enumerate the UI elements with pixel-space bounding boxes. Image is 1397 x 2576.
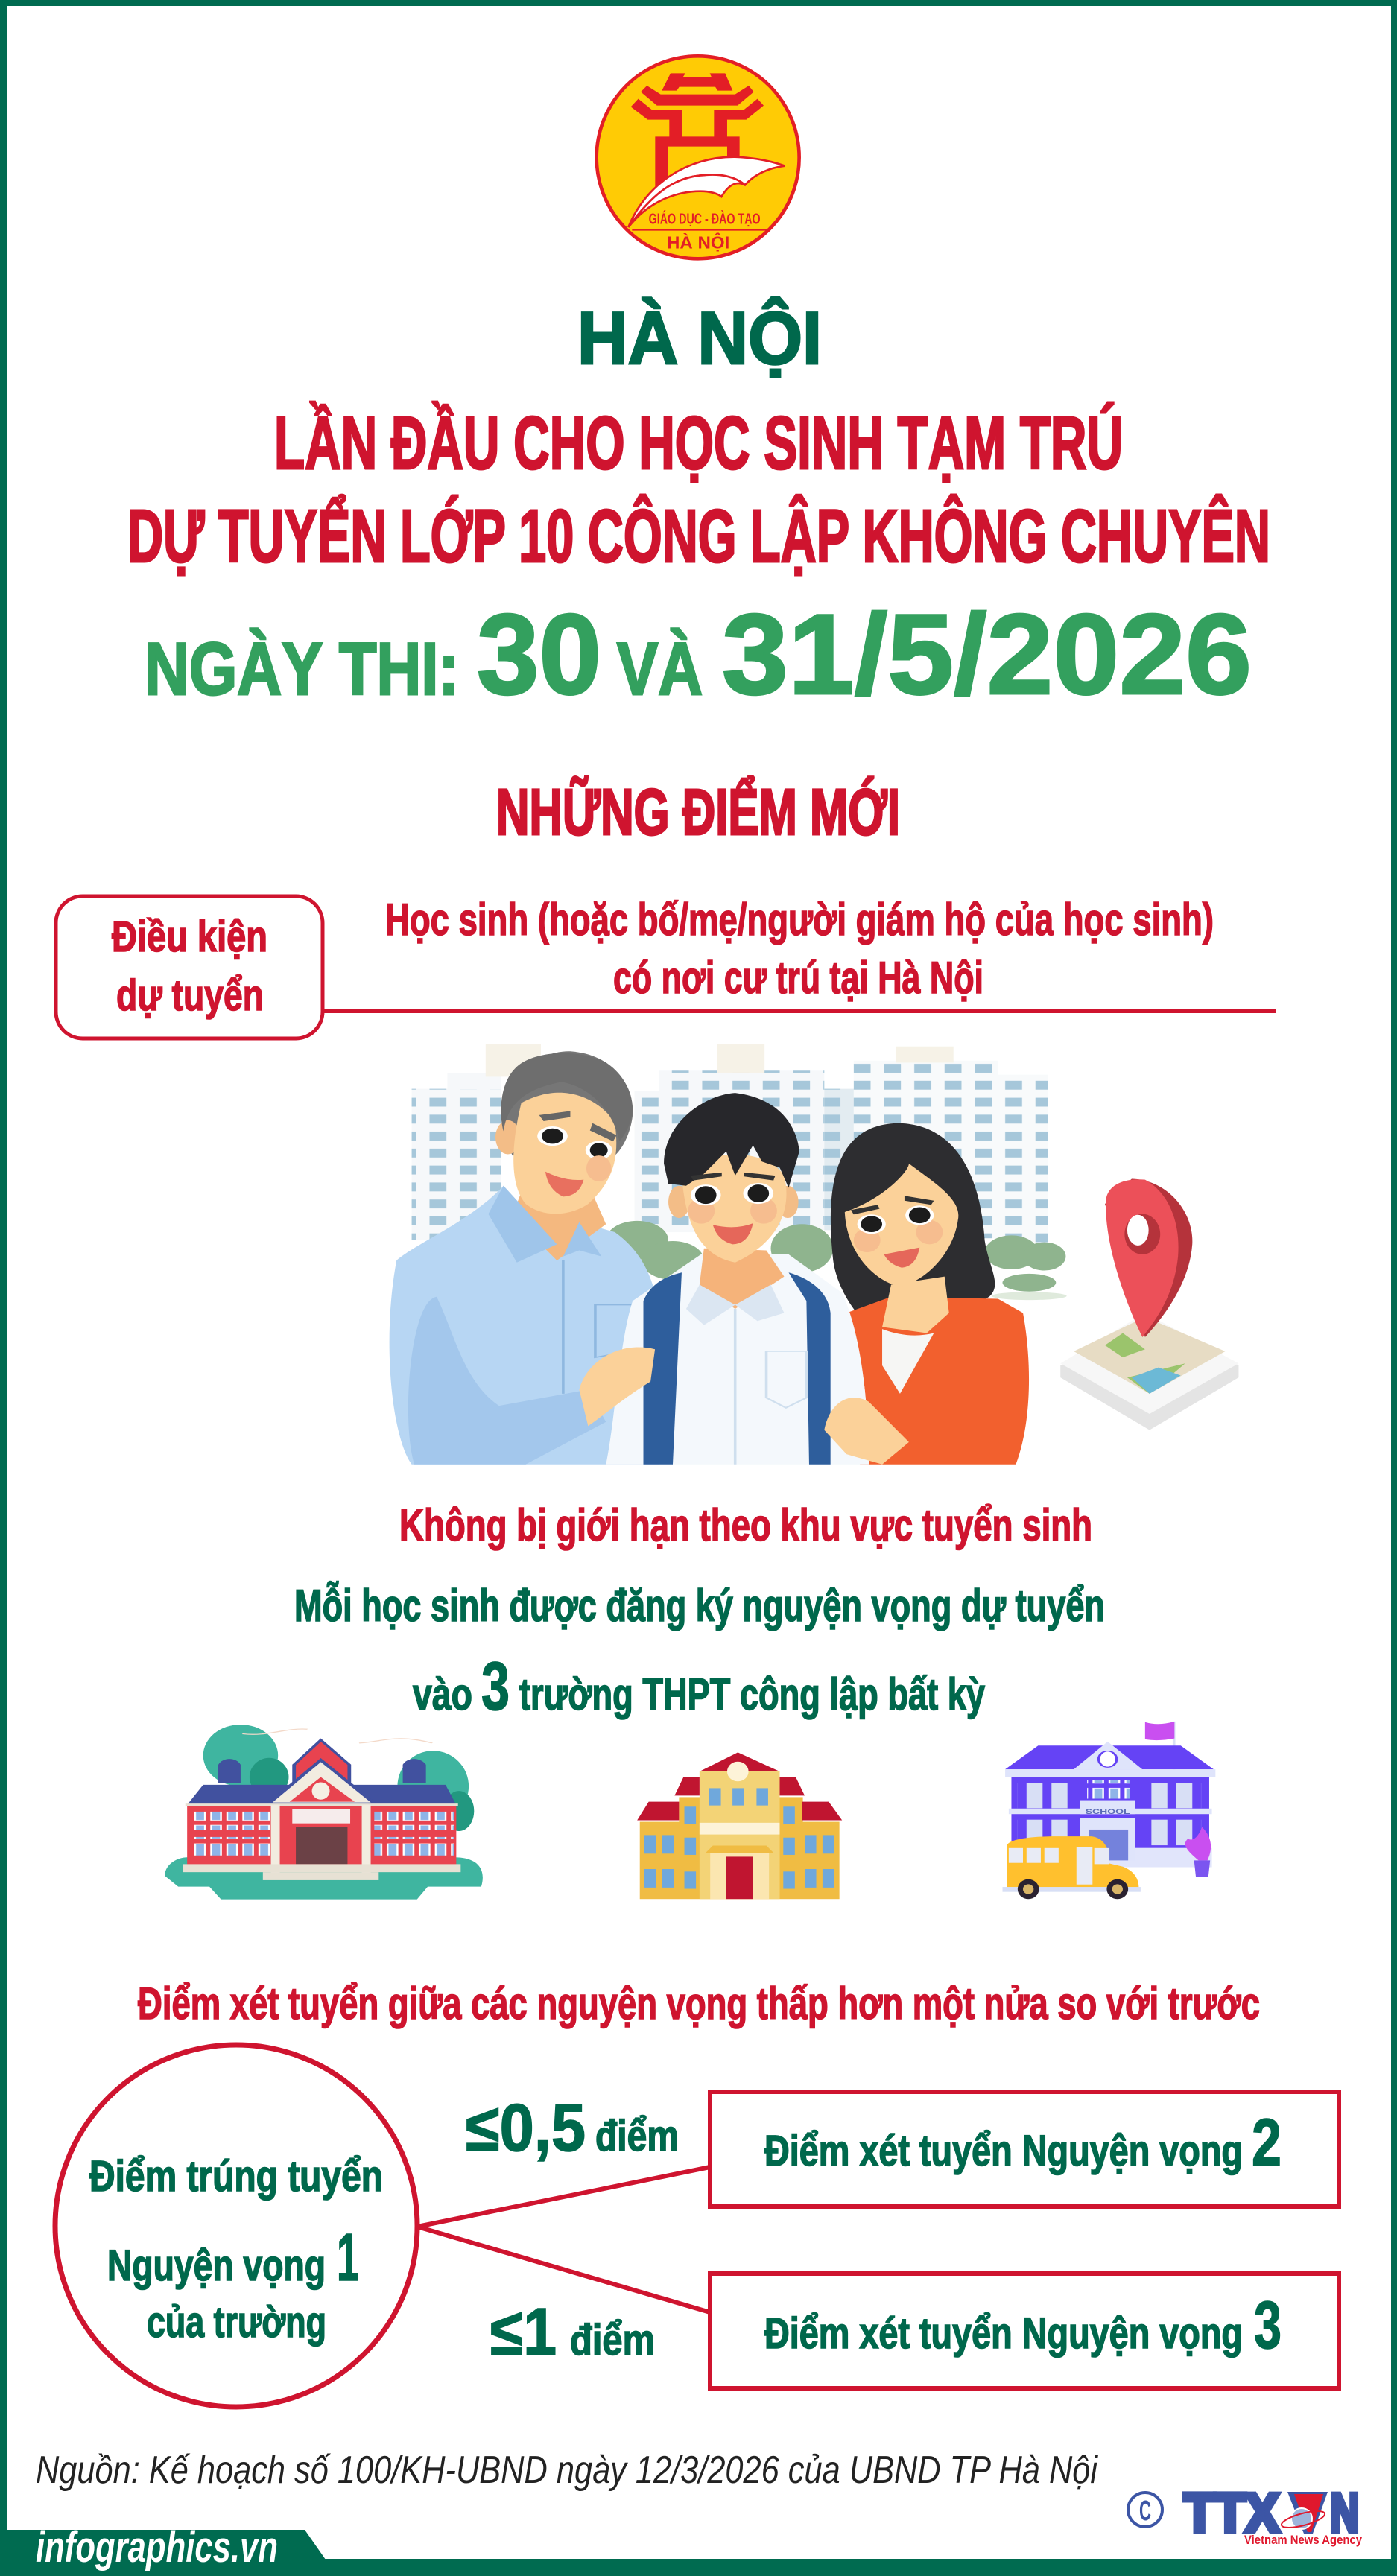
label: up to 1 point: điểm [570, 2316, 655, 2364]
copyright mark: C [1139, 2496, 1151, 2527]
icon: red school [165, 1725, 483, 1900]
label box [56, 896, 323, 1038]
footer tab: infographics.vn: infographics.vn [36, 2523, 278, 2572]
source note: Nguồn: Kế hoạch số 100/KH-UBND ngày 12/3/2026 của UBND TP Hà Nội [36, 2449, 1098, 2492]
exam date: VÀ [617, 627, 703, 710]
label text line 1: Điều kiện [112, 913, 267, 961]
apartment buildings [412, 1044, 1048, 1243]
exam date: 31/5/2026 [722, 591, 1252, 718]
box: second choice [710, 2092, 1339, 2207]
logo: TTXVN: Vietnam News Agency [1244, 2533, 1362, 2547]
exam date: 30 [477, 591, 601, 718]
exam date: NGÀY THI: [145, 627, 459, 710]
icon: purple school and school bus: SCHOOL [1086, 1808, 1130, 1816]
circle: first-choice score: Nguyện vọng [107, 2242, 326, 2290]
logo: Sở Giáo dục Đào tạo Hà Nội: GIÁO DỤC - ĐÀO TẠO [649, 211, 761, 228]
logo: TTXVN: TTX [1184, 2484, 1279, 2543]
icon: yellow school [637, 1752, 842, 1899]
father [390, 1051, 659, 1465]
copyright mark [1128, 2493, 1162, 2527]
student [579, 1093, 909, 1465]
label: up to 1 point: ≤1 [490, 2295, 557, 2370]
box: third choice: Điểm xét tuyển Nguyện vọng [764, 2309, 1243, 2358]
logo: TTXVN: N [1331, 2484, 1359, 2543]
section heading: những điểm mới: NHỮNG ĐIỂM MỚI [496, 776, 900, 848]
icon: location pin on map [1060, 1179, 1238, 1430]
connector lines [417, 2167, 710, 2312]
exam date [145, 591, 1252, 718]
logo: Sở Giáo dục Đào tạo Hà Nội: HÀ NỘI [667, 232, 729, 252]
label: up to 0.5 points: điểm [595, 2112, 679, 2160]
statement: registration line 1: Mỗi học sinh được đăng ký nguyện vọng dự tuyển [294, 1581, 1105, 1631]
label: up to 0.5 points: ≤0,5 [466, 2091, 586, 2166]
circle: first-choice score: của trường [147, 2298, 326, 2347]
box: second choice: Điểm xét tuyển Nguyện vọng [764, 2127, 1243, 2175]
box: second choice: 2 [1252, 2106, 1282, 2180]
illustration: family in front of apartment buildings [390, 1044, 1067, 1465]
icon: purple school and school bus [1003, 1722, 1215, 1899]
circle: first-choice score: Điểm trúng tuyển [89, 2152, 383, 2201]
circle: first-choice score: 1 [337, 2221, 359, 2295]
statement: registration line 2: 3 [481, 1649, 510, 1725]
statement: registration line 2: trường THPT công lập bất kỳ [519, 1669, 985, 1719]
box: third choice [710, 2274, 1339, 2388]
mother [831, 1123, 1029, 1465]
box: third choice: 3 [1254, 2288, 1282, 2363]
label: up to 0.5 points [466, 2091, 679, 2166]
statement: registration line 2 [413, 1649, 985, 1725]
logo: Sở Giáo dục Đào tạo Hà Nội [597, 56, 799, 258]
panel: điều kiện dự tuyển [56, 895, 1276, 1038]
circle: first-choice score [55, 2045, 417, 2407]
statement: registration line 2: vào [413, 1669, 472, 1719]
title: Hà Nội: HÀ NỘI [577, 296, 822, 379]
logo: TTXVN [1184, 2484, 1362, 2547]
label text line 2: dự tuyển [116, 971, 264, 1020]
statement: no enrolment zone limit: Không bị giới hạn theo khu vực tuyển sinh [399, 1500, 1092, 1550]
trees [606, 1221, 1067, 1300]
condition text line 2: có nơi cư trú tại Hà Nội [613, 953, 983, 1003]
label: up to 1 point [490, 2295, 655, 2370]
